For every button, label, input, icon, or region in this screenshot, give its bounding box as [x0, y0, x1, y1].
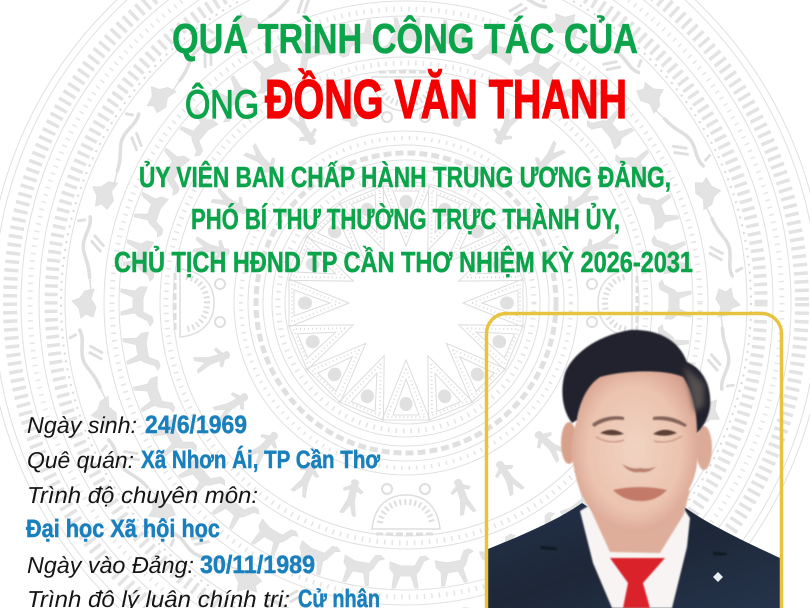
- portrait: shirt: [580, 505, 690, 608]
- party admission date: 30/11/1989: [200, 551, 315, 579]
- portrait: right ear: [696, 426, 712, 470]
- position line 2: PHÓ BÍ THƯ THƯỜNG TRỰC THÀNH ỦY,: [191, 203, 620, 236]
- hometown: Xã Nhơn Ái, TP Cần Thơ: [141, 445, 380, 474]
- subtitle: positions: [114, 161, 693, 279]
- date of birth: Ngày sinh:: [27, 412, 137, 438]
- portrait: eye bags: [596, 436, 682, 442]
- date of birth: 24/6/1969: [145, 411, 247, 439]
- portrait: suit: [488, 503, 780, 608]
- position line 3: CHỦ TỊCH HĐND TP CẦN THƠ NHIỆM KỲ 2026-2031: [114, 246, 693, 279]
- portrait: neck: [584, 490, 690, 553]
- political theory level: [29, 588, 379, 608]
- portrait: left ear: [561, 422, 577, 464]
- portrait: eyes: [600, 430, 677, 436]
- date of birth: [28, 414, 246, 438]
- portrait: mouth: [613, 487, 667, 501]
- portrait: nose: [622, 464, 657, 472]
- party admission date: [28, 554, 314, 578]
- professional qualification value: Đại học Xã hội học: [26, 515, 220, 543]
- hometown: [27, 445, 380, 474]
- professional qualification label: Trình độ chuyên môn:: [27, 482, 258, 508]
- portrait: face: [571, 365, 698, 533]
- personal information: [26, 411, 380, 608]
- portrait: tie: [610, 558, 665, 608]
- portrait frame: [486, 314, 782, 608]
- party admission date: Ngày vào Đảng:: [27, 552, 194, 578]
- portrait: eyebrows: [592, 416, 687, 427]
- position line 1: ỦY VIÊN BAN CHẤP HÀNH TRUNG ƯƠNG ĐẢNG,: [139, 161, 671, 194]
- portrait: grey hair at temple: [684, 366, 704, 412]
- hometown: Quê quán:: [27, 447, 134, 473]
- portrait panel: [486, 314, 782, 608]
- portrait: hair: [562, 330, 710, 433]
- portrait: lapel pin: [713, 572, 723, 582]
- title line 1: QUÁ TRÌNH CÔNG TÁC CỦA: [172, 15, 638, 62]
- portrait: lapel slits: [540, 546, 727, 555]
- title: [172, 15, 638, 130]
- title prefix: ÔNG: [185, 83, 259, 127]
- name: ĐỒNG VĂN THANH: [265, 68, 627, 130]
